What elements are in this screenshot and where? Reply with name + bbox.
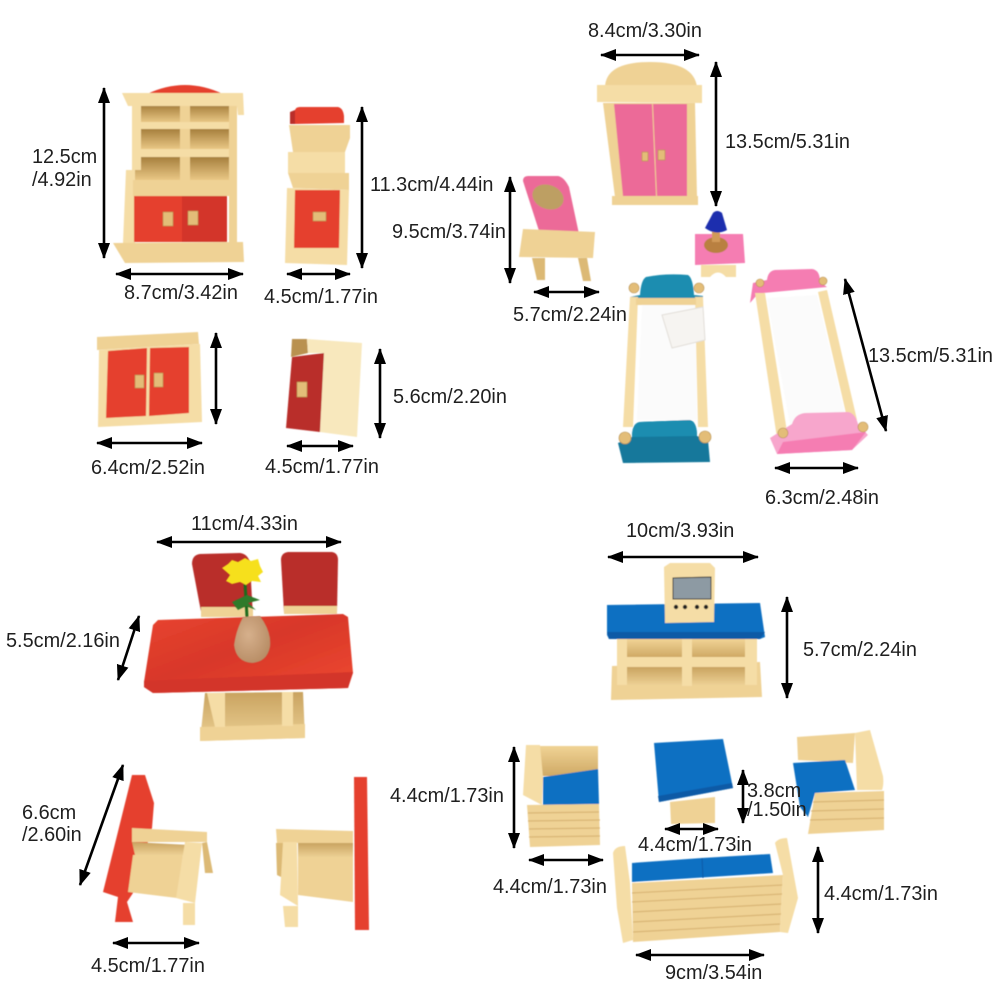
arrow: vanity height (509, 177, 511, 283)
label: coffee table height: 3.8cm (747, 780, 801, 802)
label: vanity height: 9.5cm/3.74in (392, 221, 506, 243)
arrow: vanity width (534, 291, 599, 293)
arrow: armchair width (529, 859, 603, 861)
label: sofa height: 4.4cm/1.73in (824, 883, 938, 905)
label: armchair height: 4.4cm/1.73in (390, 785, 504, 807)
label: sink unit width: 4.5cm/1.77in (264, 286, 378, 308)
arrow: chair width (113, 942, 199, 944)
label: chair width: 4.5cm/1.77in (91, 955, 205, 977)
icon: rear dining chairs (192, 552, 338, 617)
icon: left dining chair (103, 775, 213, 925)
label: wardrobe width: 8.4cm/3.30in (588, 20, 702, 42)
icon: kitchen hutch (113, 85, 244, 263)
label: vanity width: 5.7cm/2.24in (513, 304, 627, 326)
arrow: TV stand height (786, 597, 788, 698)
panel: dining furniture (6, 513, 369, 977)
arrow: cupboard width (97, 442, 202, 444)
icon: red dining table (144, 614, 353, 741)
label: cabinet height: 5.6cm/2.20in (393, 386, 507, 408)
icon: red double-door cupboard (97, 332, 202, 427)
arrow: sofa height (817, 847, 819, 933)
icon: pink vanity with mirror (519, 176, 595, 281)
label: TV stand width: 10cm/3.93in (626, 520, 734, 542)
arrow: cabinet height (379, 349, 381, 438)
arrow: wardrobe width (601, 54, 699, 56)
label: TV stand height: 5.7cm/2.24in (803, 639, 917, 661)
label: table width: 5.5cm/2.16in (6, 630, 120, 652)
label: cabinet width: 4.5cm/1.77in (265, 456, 379, 478)
label: sink unit height: 11.3cm/4.44in (370, 174, 493, 196)
arrow: table width (118, 616, 139, 680)
icon: right armchair (793, 730, 884, 834)
arrow: chair height (80, 765, 123, 885)
arrow: TV stand width (608, 556, 758, 558)
icon: sofa (613, 838, 798, 943)
icon: small dark red cabinet (286, 339, 362, 437)
icon: left armchair (523, 745, 600, 847)
icon: blue coffee table (654, 739, 733, 824)
panel: living room furniture (390, 520, 938, 984)
icon: right dining chair (276, 777, 369, 930)
label: coffee table height: /1.50in (747, 799, 807, 821)
arrow: bed width (775, 467, 858, 469)
label: hutch height: /4.92in (32, 169, 92, 191)
label: bed length: 13.5cm/5.31in (868, 345, 993, 367)
icon: TV stand with television (607, 563, 765, 700)
icon: flower in vase (222, 558, 270, 663)
icon: pink wardrobe (597, 62, 702, 205)
label: hutch width: 8.7cm/3.42in (124, 282, 238, 304)
arrow: sink unit width (287, 273, 350, 275)
label: sofa width: 9cm/3.54in (665, 962, 762, 984)
arrow: armchair height (513, 747, 515, 848)
arrow: sofa width (636, 954, 764, 956)
label: chair height: /2.60in (22, 824, 82, 846)
panel: kitchen furniture (32, 85, 507, 479)
icon: blue bed (618, 274, 711, 463)
icon: pink bed (750, 269, 868, 454)
arrow: bed length (845, 279, 886, 431)
arrow: cupboard height (215, 333, 217, 424)
arrow: coffee table height (742, 770, 744, 823)
label: coffee table width: 4.4cm/1.73in (638, 834, 752, 856)
label: chair height: 6.6cm (22, 802, 76, 824)
label: wardrobe height: 13.5cm/5.31in (725, 131, 850, 153)
label: table length: 11cm/4.33in (191, 513, 298, 535)
panel: bedroom furniture (392, 20, 993, 509)
label: hutch height: 12.5cm (32, 146, 97, 168)
icon: nightstand with blue lamp (695, 211, 745, 277)
label: armchair width: 4.4cm/1.73in (493, 876, 607, 898)
arrow: wardrobe height (715, 62, 717, 206)
label: cupboard width: 6.4cm/2.52in (91, 457, 205, 479)
arrow: table length (157, 541, 341, 543)
arrow: cabinet width (287, 445, 353, 447)
arrow: sink unit height (361, 107, 363, 268)
label: bed width: 6.3cm/2.48in (765, 487, 879, 509)
icon: kitchen sink unit (285, 107, 350, 265)
arrow: hutch height (103, 88, 105, 258)
arrow: hutch width (116, 273, 243, 275)
arrow: coffee table width (665, 828, 718, 830)
